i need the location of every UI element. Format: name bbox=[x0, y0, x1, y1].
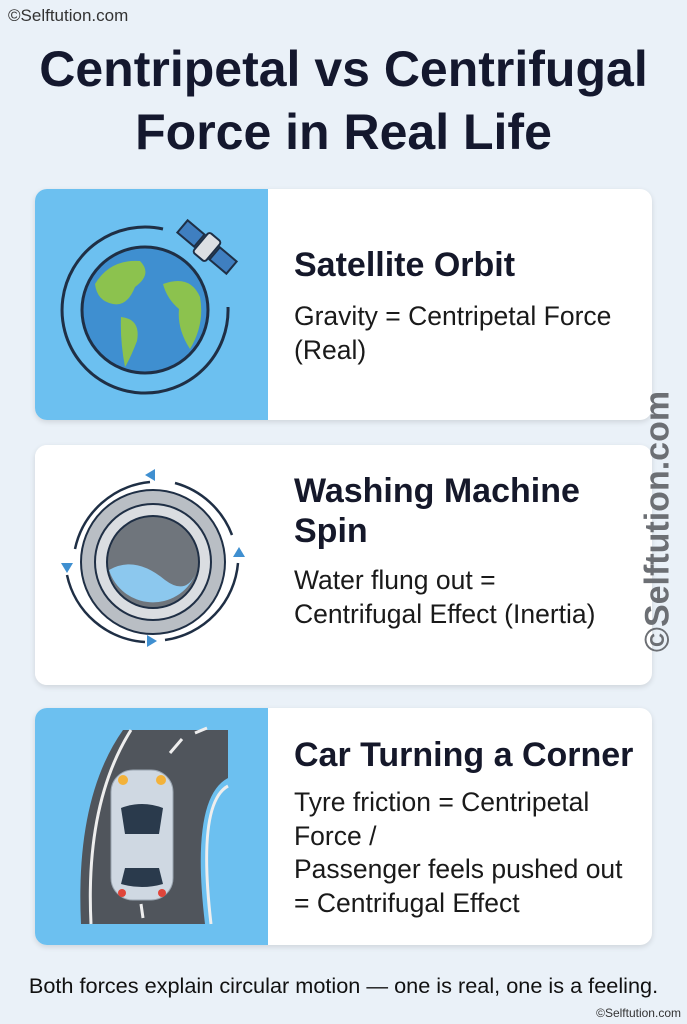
text: Force / bbox=[294, 820, 376, 850]
title bbox=[39, 41, 648, 160]
panel: car turning bbox=[35, 708, 652, 945]
icon: car on curved road bbox=[35, 708, 268, 945]
heading: Spin bbox=[294, 512, 368, 550]
watermark vertical: ©Selftution.com bbox=[638, 391, 676, 652]
title: Force in Real Life bbox=[135, 104, 552, 160]
text: = Centrifugal Effect bbox=[294, 888, 520, 918]
icon: washing machine drum bbox=[35, 445, 268, 685]
text: Water flung out = bbox=[294, 565, 496, 595]
text bbox=[294, 787, 623, 918]
text: Passenger feels pushed out bbox=[294, 854, 623, 884]
heading bbox=[294, 472, 580, 550]
text bbox=[294, 301, 611, 365]
text: Centrifugal Effect (Inertia) bbox=[294, 599, 595, 629]
heading: Washing Machine bbox=[294, 472, 580, 510]
title: Centripetal vs Centrifugal bbox=[39, 41, 648, 97]
text: (Real) bbox=[294, 335, 366, 365]
footer text: Both forces explain circular motion — one is real, one is a feeling. bbox=[29, 973, 658, 998]
heading: Satellite Orbit bbox=[294, 246, 515, 284]
watermark bottom: ©Selftution.com bbox=[596, 1006, 681, 1020]
text: Gravity = Centripetal Force bbox=[294, 301, 611, 331]
watermark top: ©Selftution.com bbox=[8, 6, 128, 25]
panel: satellite orbit bbox=[35, 189, 652, 420]
text bbox=[294, 565, 595, 629]
text: Tyre friction = Centripetal bbox=[294, 787, 589, 817]
icon: earth with satellite bbox=[35, 189, 268, 420]
heading: Car Turning a Corner bbox=[294, 736, 633, 774]
panel: washing machine bbox=[35, 445, 652, 685]
